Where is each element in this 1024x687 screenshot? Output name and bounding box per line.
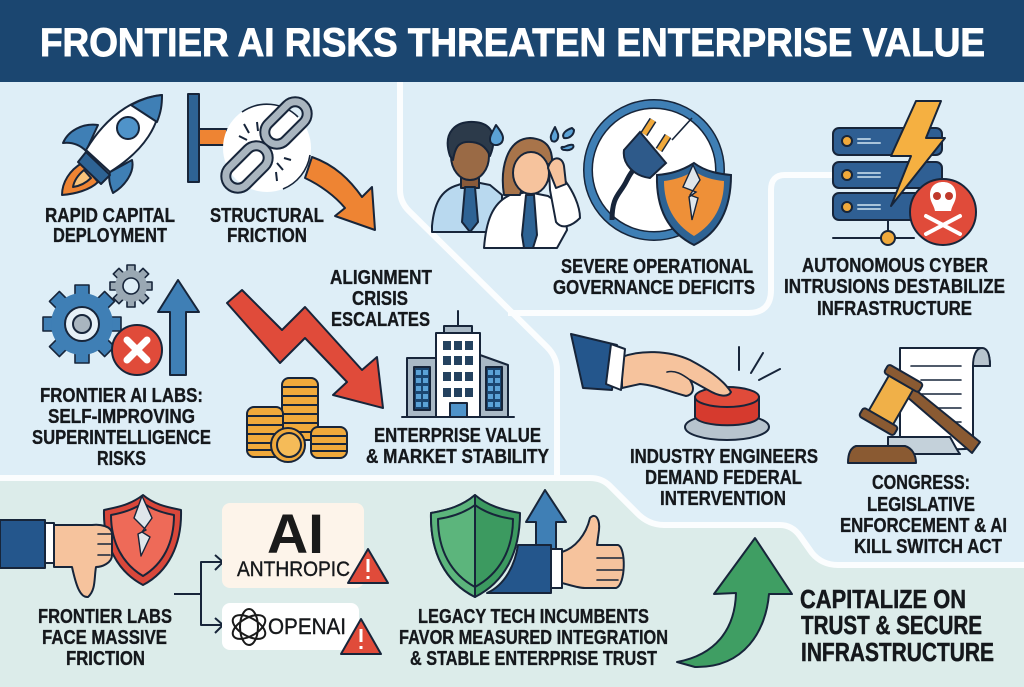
arrow: red zigzag decline	[227, 290, 383, 408]
label: autonomous cyber intrusions: INFRASTRUCTURE	[817, 298, 972, 320]
panel: openai logo: OPENAI	[268, 614, 346, 639]
icon: green shield and thumbs up	[431, 490, 624, 597]
label: severe operational governance deficits	[553, 256, 755, 299]
icon: coin stacks	[247, 378, 347, 462]
callout: capitalize on trust and secure infrastructure: TRUST & SECURE	[801, 612, 982, 640]
title banner	[0, 0, 1024, 82]
label: autonomous cyber intrusions	[784, 255, 1005, 320]
label: enterprise value and market stability: ENTERPRISE VALUE	[374, 425, 541, 447]
label: industry engineers demand federal intervention	[630, 446, 818, 510]
icon: barrier and broken chain	[188, 94, 312, 193]
panel: openai logo	[222, 603, 381, 654]
icon: office building	[402, 311, 514, 417]
icon: server under attack	[833, 101, 976, 245]
callout: capitalize on trust and secure infrastructure	[800, 586, 994, 667]
icon: unplugged power with broken shield	[588, 104, 731, 245]
label: legacy tech incumbents: LEGACY TECH INCUMBENTS	[418, 606, 649, 628]
arrow: blue upward arrow	[158, 280, 199, 375]
panel: anthropic logo: AI	[267, 502, 324, 565]
label: industry engineers demand federal intervention: INDUSTRY ENGINEERS	[630, 446, 818, 468]
label: severe operational governance deficits: SEVERE OPERATIONAL	[561, 256, 753, 278]
label: legacy tech incumbents: FAVOR MEASURED INTEGRATION	[399, 627, 668, 649]
label: rapid capital deployment	[45, 205, 175, 247]
label: frontier labs face massive friction: FACE MASSIVE	[42, 627, 167, 649]
label: industry engineers demand federal intervention: DEMAND FEDERAL	[645, 467, 802, 489]
label: severe operational governance deficits: GOVERNANCE DEFICITS	[553, 277, 755, 299]
icon: rocket	[62, 95, 162, 195]
label: rapid capital deployment: RAPID CAPITAL	[45, 205, 175, 227]
label: autonomous cyber intrusions: AUTONOMOUS CYBER	[802, 255, 988, 277]
label: enterprise value and market stability	[366, 425, 550, 468]
callout: capitalize on trust and secure infrastructure: CAPITALIZE ON	[800, 586, 966, 614]
icon: hand pressing red kill button	[571, 334, 780, 440]
panel: anthropic logo: ANTHROPIC	[237, 558, 350, 581]
label: alignment crisis escalates: ALIGNMENT	[330, 267, 432, 289]
label: enterprise value and market stability: & MARKET STABILITY	[366, 446, 550, 468]
label: congress kill switch act: CONGRESS:	[872, 472, 970, 494]
label: frontier labs face massive friction: FRONTIER LABS	[38, 606, 172, 628]
panel: anthropic logo	[222, 502, 388, 588]
icon: gavel and legislation scroll	[848, 348, 990, 463]
label: rapid capital deployment: DEPLOYMENT	[53, 225, 167, 247]
label: frontier ai labs	[32, 385, 211, 470]
label: legacy tech incumbents: & STABLE ENTERPRISE TRUST	[410, 648, 657, 670]
label: congress kill switch act	[840, 472, 1007, 558]
label: industry engineers demand federal intervention: INTERVENTION	[660, 488, 786, 510]
label: alignment crisis escalates: CRISIS	[352, 288, 408, 310]
label: frontier labs face massive friction	[38, 606, 172, 670]
arrow: green upward growth arrow	[677, 538, 792, 667]
label: legacy tech incumbents	[399, 606, 668, 670]
icon: stressed workers	[432, 122, 580, 248]
label: structural friction: STRUCTURAL	[210, 205, 324, 227]
label: frontier labs face massive friction: FRICTION	[66, 648, 145, 670]
label: frontier ai labs: SUPERINTELLIGENCE	[32, 427, 211, 449]
icon: gears with red x	[43, 265, 162, 375]
label: alignment crisis escalates	[330, 267, 432, 331]
label: congress kill switch act: KILL SWITCH ACT	[854, 536, 1002, 558]
icon: thumbs down with cracked red shield	[0, 495, 181, 597]
arrow: orange friction arrow	[305, 157, 375, 230]
label: frontier ai labs: SELF-IMPROVING	[48, 406, 195, 428]
label: structural friction	[210, 205, 324, 247]
label: alignment crisis escalates: ESCALATES	[331, 309, 430, 331]
arrow: branch to anthropic and openai	[174, 555, 223, 633]
label: structural friction: FRICTION	[227, 225, 307, 247]
label: frontier ai labs: RISKS	[97, 448, 146, 470]
label: congress kill switch act: LEGISLATIVE	[867, 494, 975, 516]
label: frontier ai labs: FRONTIER AI LABS:	[40, 385, 203, 407]
